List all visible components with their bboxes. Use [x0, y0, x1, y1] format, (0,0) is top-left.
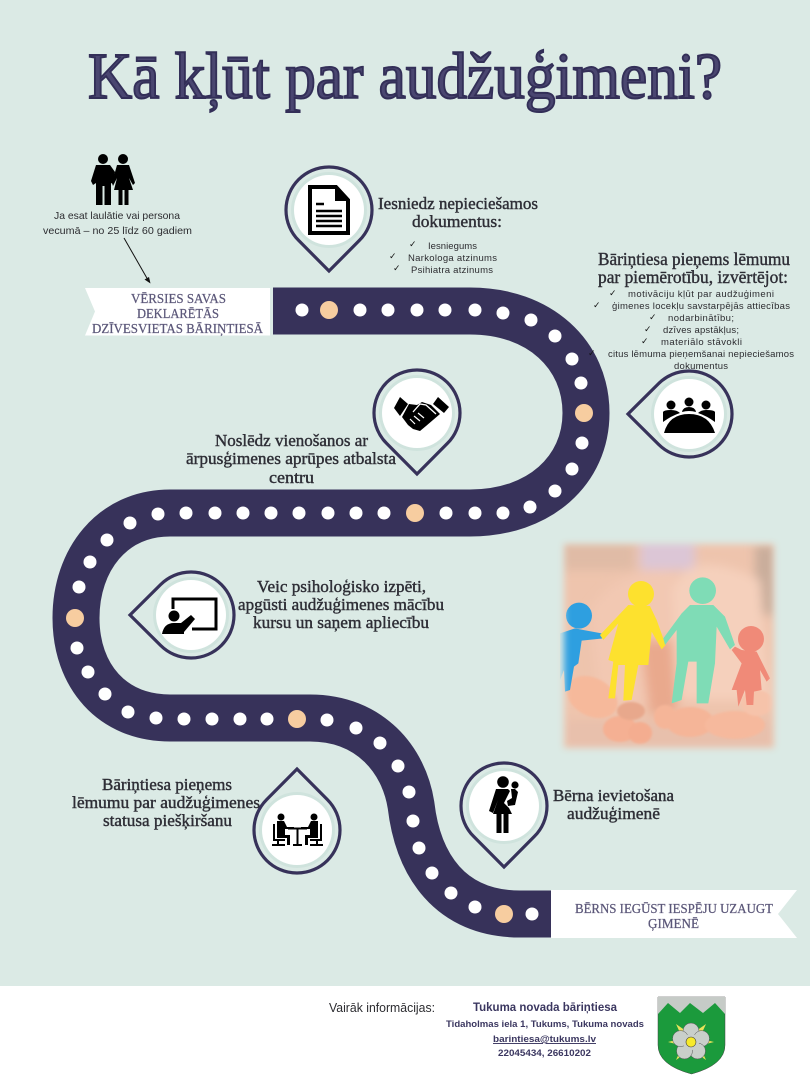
ribbon: end: BĒRNS IEGŪST IESPĒJU UZAUGT — [575, 901, 773, 917]
text: submit documents: Psihiatra atzinums — [411, 265, 493, 276]
icon: handshake — [394, 397, 449, 431]
text: status decision: lēmumu par audžuģimenes — [72, 793, 260, 812]
icon: document — [310, 187, 348, 233]
text: status decision — [72, 775, 260, 830]
text: submit documents: Narkologa atzinums — [408, 253, 497, 264]
age requirement text: vecumā – no 25 līdz 60 gadiem — [43, 225, 192, 237]
ribbon: end — [551, 890, 797, 938]
text: suitability decision: ✓ — [649, 313, 657, 323]
text: suitability decision: ✓ — [588, 349, 596, 359]
text: suitability decision: nodarbinātību; — [668, 313, 734, 324]
arrow to first ribbon — [124, 238, 150, 284]
text: submit documents: dokumentus: — [412, 212, 502, 231]
text: psychological assessment: kursu un saņem apliecību — [253, 613, 429, 632]
footer panel: Vairāk informācijas: — [329, 1000, 435, 1015]
text: suitability decision: ✓ — [593, 301, 601, 311]
footer panel: barintiesa@tukums.lv — [493, 1034, 597, 1045]
footer panel: Tukuma novada bāriņtiesa — [473, 1002, 618, 1014]
text: suitability decision: dzīves apstākļus; — [663, 325, 739, 336]
text: psychological assessment: Veic psiholoģisko izpēti, — [257, 577, 426, 596]
text: submit documents: Iesniedz nepieciešamos — [378, 194, 538, 213]
text: psychological assessment: apgūsti audžuģimenes mācību — [238, 595, 444, 614]
text: suitability decision: par piemērotību, izvērtējot: — [598, 267, 788, 287]
text: submit documents: ✓ — [393, 264, 401, 274]
text: psychological assessment — [238, 577, 444, 632]
text: submit documents — [378, 194, 538, 276]
footer panel: Tidaholmas iela 1, Tukums, Tukuma novads — [446, 1019, 644, 1030]
ribbon: start: VĒRSIES SAVAS — [131, 291, 226, 307]
icon: two people at a table — [272, 814, 323, 846]
text: agreement: centru — [269, 468, 314, 487]
icon: couple — [91, 154, 135, 205]
footer panel: 22045434, 26610202 — [498, 1048, 591, 1059]
text: agreement: Noslēdz vienošanos ar — [215, 431, 369, 450]
pin: meeting — [628, 371, 732, 457]
icon: people around a table — [663, 398, 715, 433]
text: suitability decision: motivāciju kļūt par audžuģimeni — [628, 289, 774, 300]
coat of arms — [658, 997, 725, 1074]
text: suitability decision: citus lēmuma pieņemšanai nepieciešamos — [608, 349, 794, 360]
winding road — [66, 301, 593, 923]
text: placement — [553, 786, 675, 823]
pin: placement — [461, 763, 547, 867]
pin: document — [286, 167, 372, 271]
text: suitability decision: Bāriņtiesa pieņems lēmumu — [598, 249, 790, 269]
text: submit documents: ✓ — [389, 252, 397, 262]
pin: handshake — [374, 370, 460, 474]
ribbon: start: DEKLARĒTĀS — [137, 306, 219, 322]
text: suitability decision: materiālo stāvokli — [661, 337, 742, 348]
text: submit documents: Iesniegums — [428, 241, 477, 252]
text: suitability decision — [588, 249, 794, 372]
photo: paper family in hands — [555, 535, 783, 757]
ribbon: start: DZĪVESVIETAS BĀRIŅTIESĀ — [92, 321, 264, 337]
pin: teaching — [130, 572, 234, 658]
text: status decision: statusa piešķiršanu — [103, 811, 232, 830]
icon: mother with child — [489, 776, 519, 833]
text: status decision: Bāriņtiesa pieņems — [102, 775, 232, 794]
text: placement: audžuģimenē — [567, 804, 660, 823]
text: suitability decision: dokumentus — [674, 361, 728, 372]
text: suitability decision: ✓ — [609, 289, 617, 299]
text: suitability decision: ģimenes locekļu savstarpējās attiecības — [612, 301, 790, 312]
footer panel — [0, 986, 810, 1080]
title: Kā kļūt par audžuģimeni? — [88, 40, 722, 113]
icon: teacher at board — [162, 599, 216, 634]
text: placement: Bērna ievietošana — [553, 786, 675, 805]
text: agreement — [186, 431, 397, 487]
text: suitability decision: ✓ — [644, 325, 652, 335]
ribbon: end: ĢIMENĒ — [648, 916, 699, 932]
text: agreement: ārpusģimenes aprūpes atbalsta — [186, 449, 397, 468]
text: submit documents: ✓ — [409, 240, 417, 250]
ribbon: start — [85, 288, 270, 337]
pin: decision meeting — [254, 769, 340, 873]
text: suitability decision: ✓ — [641, 337, 649, 347]
age requirement text — [43, 210, 192, 237]
age requirement text: Ja esat laulātie vai persona — [54, 210, 180, 222]
